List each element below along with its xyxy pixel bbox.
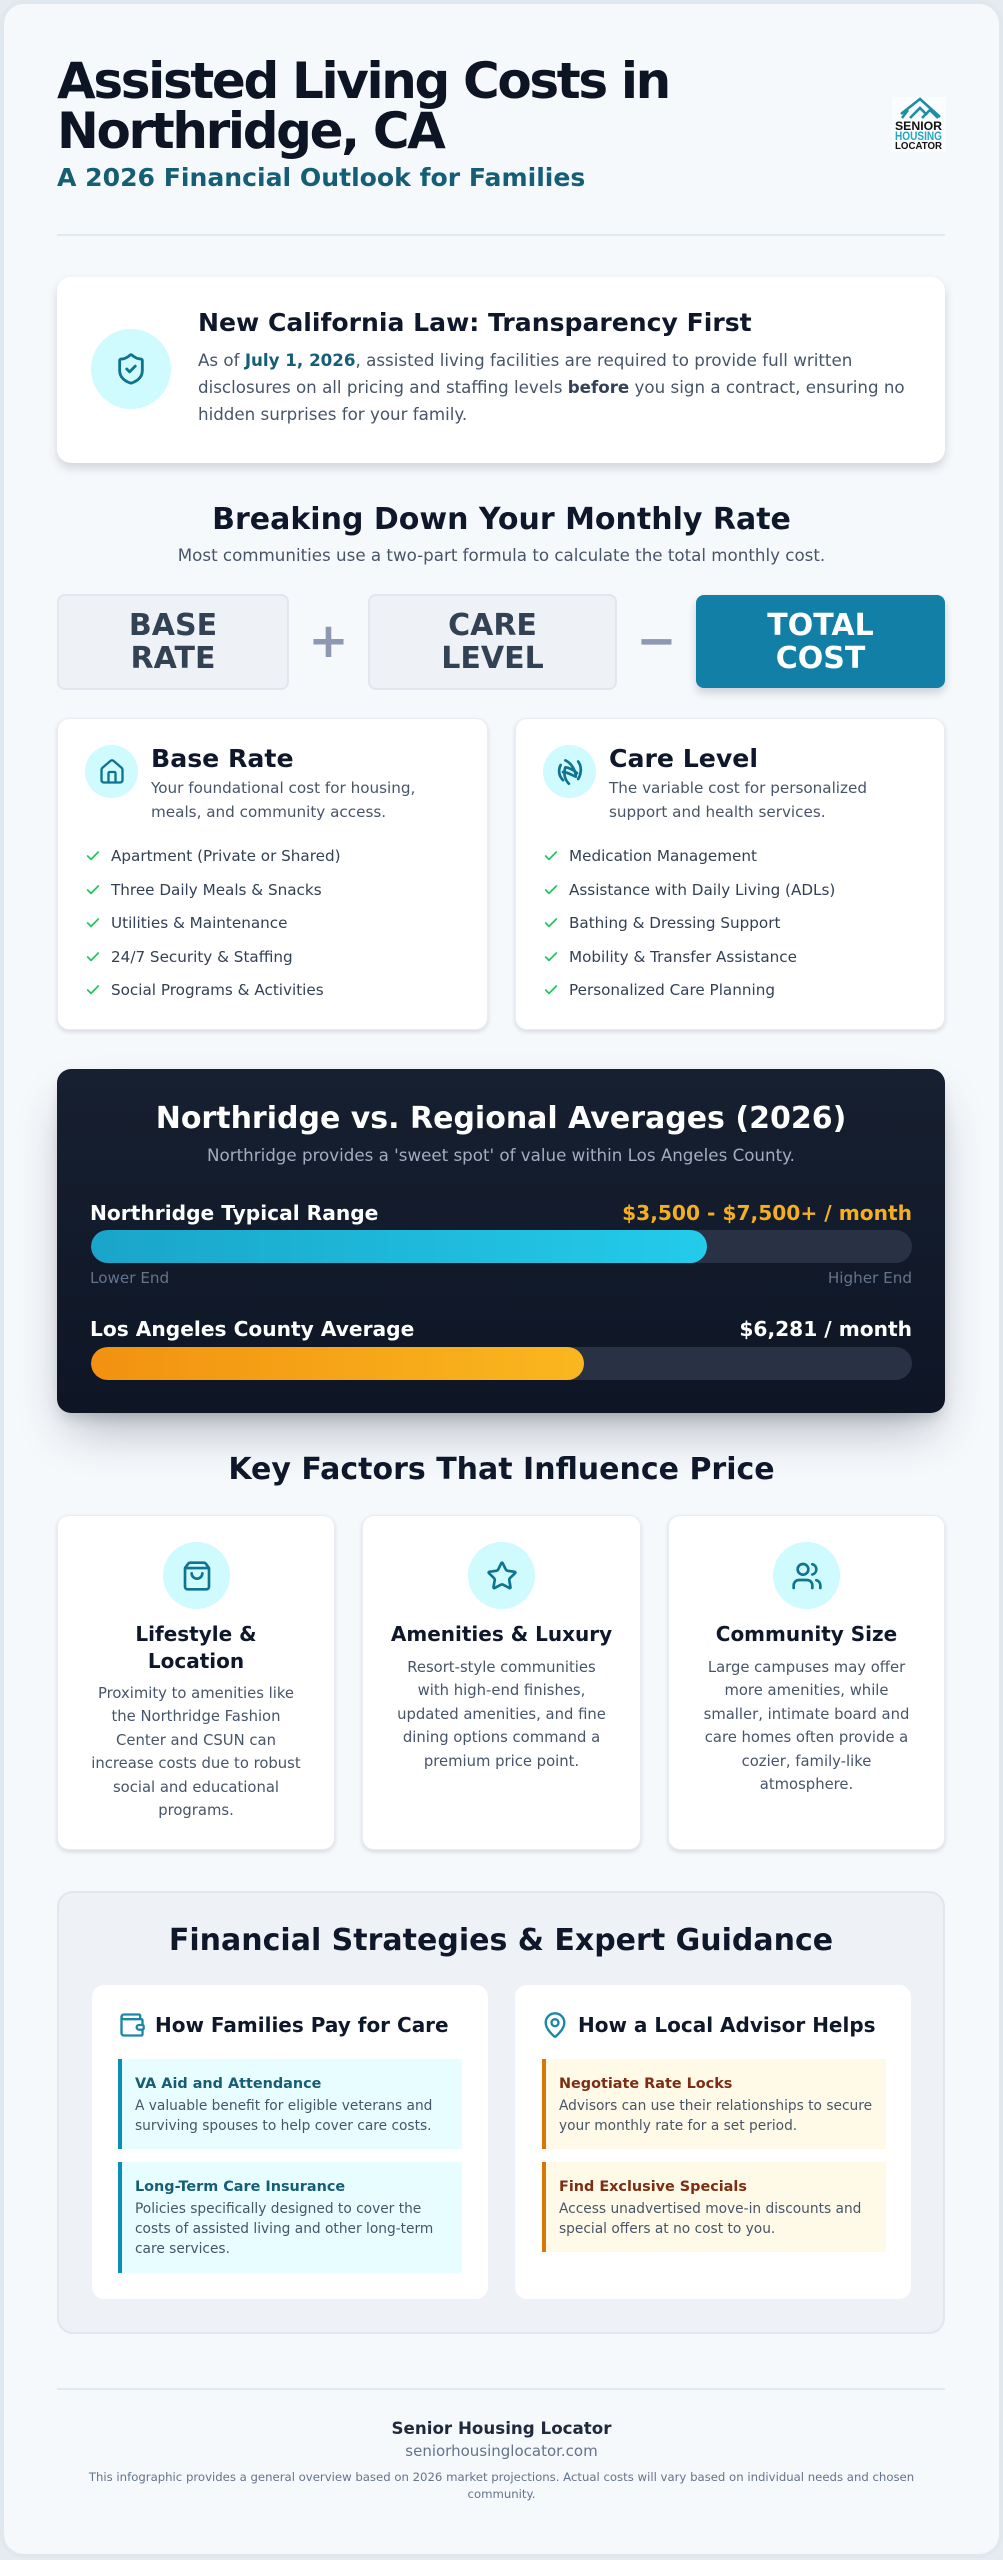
formula: equals: − — [636, 613, 677, 669]
northridge label: Northridge Typical Range — [90, 1201, 378, 1225]
formula: total cost — [696, 595, 945, 688]
care level description — [608, 779, 867, 821]
panel: amenities and luxury — [362, 1515, 641, 1850]
formula: base rate: RATE — [131, 641, 215, 676]
community size text: more amenities, while — [724, 1682, 889, 1699]
panel: lifestyle and location — [57, 1515, 335, 1850]
lifestyle heading — [135, 1622, 257, 1673]
title: Assisted Living Costs in — [57, 52, 669, 110]
VA aid text — [135, 2098, 432, 2134]
panel: base rate — [57, 718, 488, 1030]
insurance text: care services. — [135, 2241, 230, 2257]
formula: base rate — [57, 594, 289, 690]
law text — [198, 350, 905, 424]
title — [57, 52, 669, 160]
formula: plus: + — [308, 613, 349, 669]
how families pay heading: How Families Pay for Care — [155, 2013, 449, 2037]
lifestyle text: Proximity to amenities like — [98, 1685, 294, 1702]
icon: shield check — [91, 329, 171, 409]
base rate inclusions: Utilities & Maintenance — [111, 914, 287, 932]
subtitle: A 2026 Financial Outlook for Families — [57, 163, 585, 192]
base rate inclusions: Apartment (Private or Shared) — [111, 847, 341, 865]
formula: care level: LEVEL — [441, 641, 544, 676]
insurance text: costs of assisted living and other long-term — [135, 2221, 433, 2237]
community size text: smaller, intimate board and — [704, 1706, 909, 1723]
specials text: special offers at no cost to you. — [559, 2221, 775, 2237]
rate locks text — [559, 2098, 872, 2134]
law text: disclosures on all pricing and staffing levels before you sign a contract, ensuring no — [198, 377, 905, 397]
footer url: seniorhousinglocator.com — [405, 2442, 598, 2460]
lifestyle heading: Location — [148, 1649, 244, 1673]
insurance title: Long-Term Care Insurance — [135, 2179, 345, 2195]
disclaimer: community. — [468, 2486, 535, 2500]
tip: rate locks — [542, 2059, 886, 2149]
community size text: care homes often provide a — [705, 1729, 908, 1746]
panel: financial strategies — [57, 1891, 945, 2334]
law text: hidden surprises for your family. — [198, 404, 467, 424]
lifestyle heading: Lifestyle & — [135, 1622, 257, 1646]
strategies heading: Financial Strategies & Expert Guidance — [169, 1923, 833, 1958]
comparison heading: Northridge vs. Regional Averages (2026) — [156, 1101, 846, 1136]
specials title: Find Exclusive Specials — [559, 2179, 747, 2195]
community size heading: Community Size — [716, 1622, 897, 1646]
base rate description: meals, and community access. — [151, 803, 386, 821]
amenities text: premium price point. — [424, 1753, 579, 1770]
icon: house — [85, 745, 138, 798]
tip: VA aid — [118, 2059, 462, 2149]
county value: $6,281 / month — [739, 1317, 912, 1341]
panel: regional comparison — [57, 1069, 945, 1413]
logo: Senior Housing Locator — [895, 97, 943, 152]
care level services: Medication Management — [569, 847, 757, 865]
base rate inclusions: Three Daily Meals & Snacks — [111, 880, 322, 898]
care level heading: Care Level — [609, 744, 758, 773]
icon: shopping bag — [163, 1542, 230, 1609]
panel: care level — [515, 718, 945, 1030]
bar axis: higher end: Higher End — [828, 1269, 912, 1287]
rate locks title: Negotiate Rate Locks — [559, 2076, 732, 2092]
base rate heading: Base Rate — [151, 744, 294, 773]
comparison intro: Northridge provides a 'sweet spot' of value within Los Angeles County. — [207, 1145, 795, 1165]
care level services: Bathing & Dressing Support — [569, 914, 780, 932]
tip: exclusive specials — [542, 2162, 886, 2252]
footer brand: Senior Housing Locator — [392, 2418, 611, 2438]
specials text — [559, 2201, 861, 2237]
base rate inclusions — [86, 847, 341, 999]
panel: community size — [668, 1515, 945, 1850]
northridge value: $3,500 - $7,500+ / month — [622, 1201, 912, 1225]
icon: users — [773, 1542, 840, 1609]
amenities heading: Amenities & Luxury — [391, 1622, 612, 1646]
amenities text: Resort-style communities — [407, 1659, 596, 1676]
bar axis: lower end: Lower End — [90, 1269, 169, 1287]
disclaimer: This infographic provides a general overview based on 2026 market projections. Actual costs will vary based on individual needs and chosen — [89, 2470, 914, 2484]
base rate description — [151, 779, 415, 821]
logo: Senior Housing Locator: SENIOR — [895, 121, 943, 133]
heading: breaking down: Breaking Down Your Monthly Rate — [212, 502, 791, 537]
base rate inclusions: Social Programs & Activities — [111, 981, 324, 999]
rate locks text: your monthly rate for a set period. — [559, 2118, 797, 2134]
heading: key factors: Key Factors That Influence Price — [228, 1452, 775, 1487]
VA aid text: surviving spouses to help cover care costs. — [135, 2118, 432, 2134]
specials text: Access unadvertised move-in discounts and — [559, 2201, 861, 2217]
insurance text — [135, 2201, 433, 2257]
formula intro: Most communities use a two-part formula to calculate the total monthly cost. — [178, 545, 825, 565]
care level services — [544, 847, 835, 999]
formula: total cost: TOTAL — [767, 608, 874, 642]
care level services: Personalized Care Planning — [569, 981, 775, 999]
lifestyle text: increase costs due to robust — [91, 1755, 301, 1772]
law text: As of July 1, 2026, assisted living facilities are required to provide full written — [198, 350, 852, 370]
lifestyle text: the Northridge Fashion — [111, 1708, 280, 1725]
icon: map pin — [544, 2012, 566, 2038]
county label: Los Angeles County Average — [90, 1317, 414, 1341]
bar: county — [91, 1347, 912, 1380]
amenities text: with high-end finishes, — [418, 1682, 585, 1699]
base rate description: Your foundational cost for housing, — [151, 779, 415, 797]
community size text: atmosphere. — [760, 1776, 853, 1793]
icon: care hands — [543, 745, 596, 798]
tip: long-term care insurance — [118, 2162, 462, 2273]
community size text — [704, 1659, 909, 1793]
formula: care level: CARE — [448, 608, 537, 643]
community size text: Large campuses may offer — [708, 1659, 905, 1676]
local advisor heading: How a Local Advisor Helps — [578, 2013, 876, 2037]
care level services: Mobility & Transfer Assistance — [569, 948, 797, 966]
lifestyle text: programs. — [158, 1802, 234, 1819]
amenities text: dining options command a — [403, 1729, 600, 1746]
VA aid title: VA Aid and Attendance — [135, 2076, 321, 2092]
formula: care level — [368, 594, 617, 690]
insurance text: Policies specifically designed to cover the — [135, 2201, 421, 2217]
formula: total cost: COST — [776, 640, 865, 676]
care level services: Assistance with Daily Living (ADLs) — [569, 880, 835, 898]
formula: base rate: BASE — [129, 608, 217, 643]
panel: California law callout — [57, 277, 945, 463]
lifestyle text — [91, 1685, 301, 1819]
lifestyle text: Center and CSUN can — [116, 1732, 276, 1749]
icon: star — [468, 1542, 535, 1609]
amenities text — [397, 1659, 606, 1770]
disclaimer — [88, 2470, 914, 2500]
panel: how families pay — [92, 1985, 488, 2299]
VA aid text: A valuable benefit for eligible veterans and — [135, 2098, 432, 2114]
title: Northridge, CA — [57, 102, 444, 160]
bar: northridge — [91, 1230, 912, 1263]
base rate inclusions: 24/7 Security & Staffing — [111, 948, 293, 966]
law heading: New California Law: Transparency First — [198, 308, 752, 337]
icon: wallet — [120, 2013, 145, 2037]
lifestyle text: social and educational — [113, 1779, 279, 1796]
community size text: cozier, family-like — [742, 1753, 871, 1770]
logo: Senior Housing Locator: LOCATOR — [895, 140, 942, 152]
amenities text: updated amenities, and fine — [397, 1706, 606, 1723]
panel: local advisor — [515, 1985, 911, 2299]
care level description: support and health services. — [609, 803, 826, 821]
rate locks text: Advisors can use their relationships to secure — [559, 2098, 872, 2114]
care level description: The variable cost for personalized — [609, 779, 867, 797]
